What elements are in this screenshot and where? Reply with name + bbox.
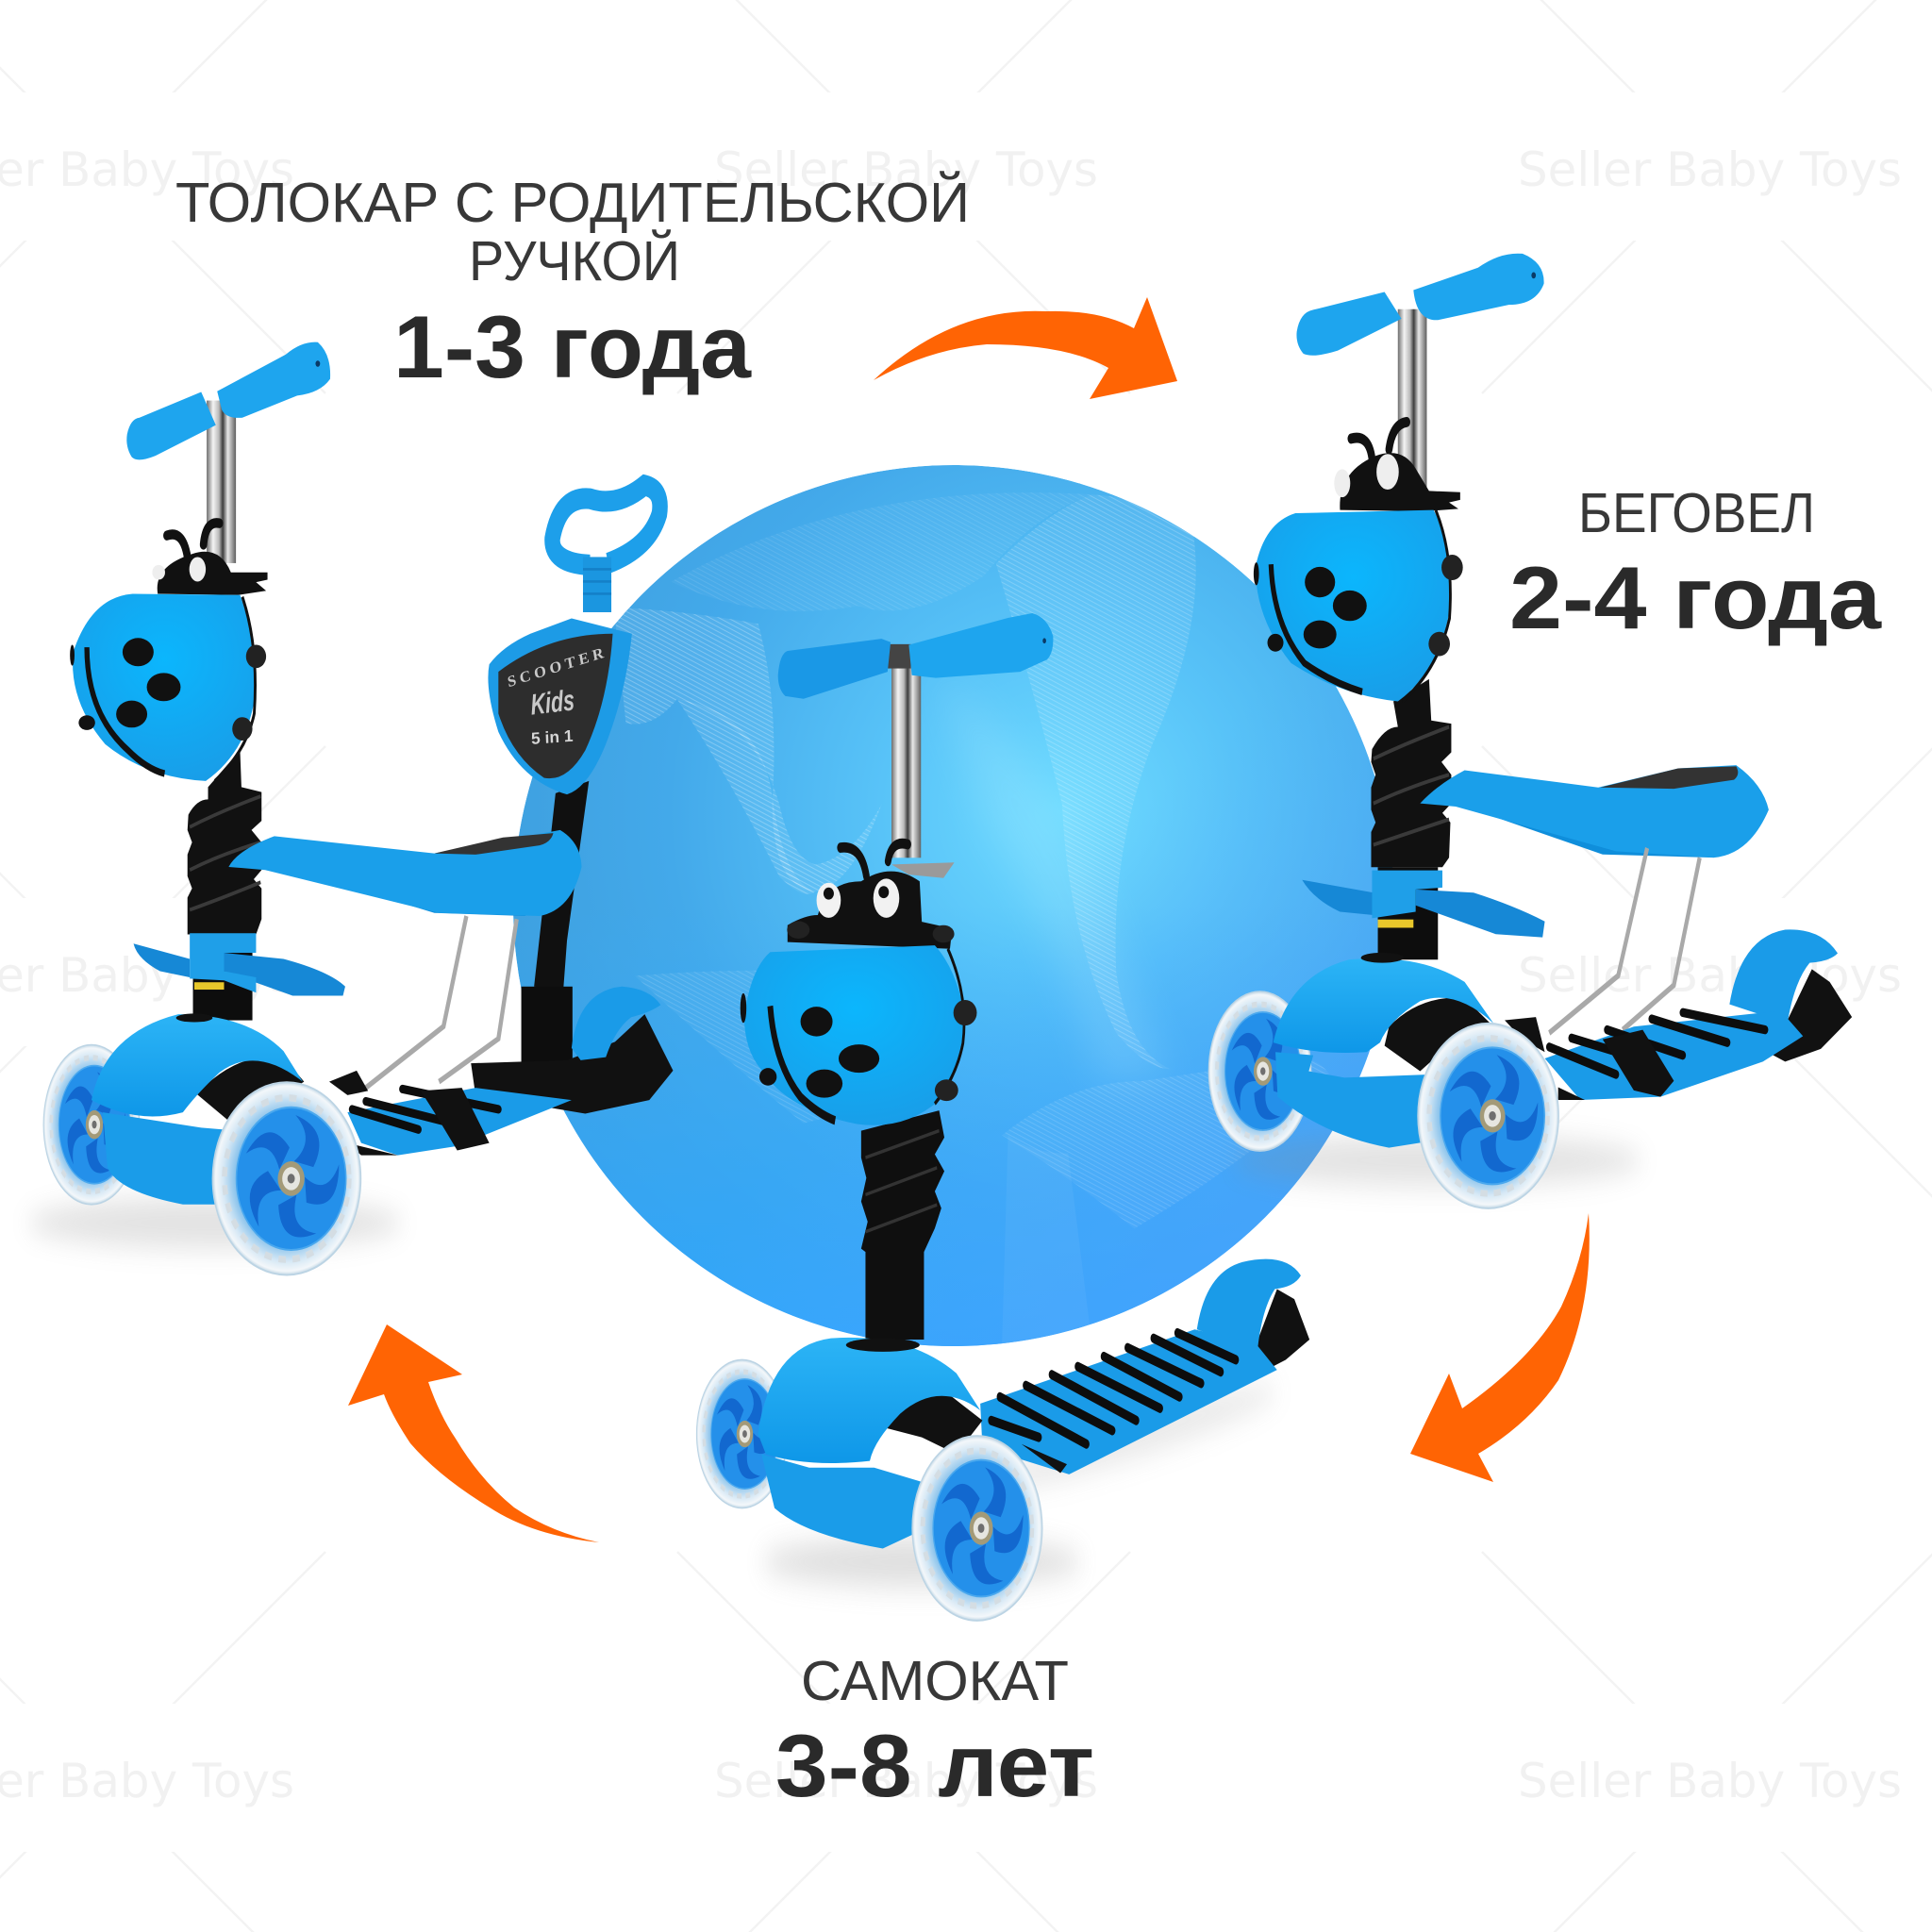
heading: balance bike: БЕГОВЕЛ	[1578, 482, 1815, 544]
spring column	[188, 750, 261, 1021]
heading: kick scooter: САМОКАТ	[801, 1650, 1069, 1712]
sign plate: 5 in 1	[531, 726, 574, 748]
ladybug basket	[1254, 422, 1463, 701]
front body and fender	[1274, 953, 1493, 1148]
right front wheel	[1418, 1024, 1558, 1208]
heading: push car: ТОЛОКАР С РОДИТЕЛЬСКОЙ	[175, 171, 970, 234]
handlebar stem	[891, 662, 921, 858]
floor shadow	[761, 1538, 1082, 1586]
front body and fender	[92, 1013, 304, 1205]
heading: push car: РУЧКОЙ	[469, 229, 680, 292]
rear bracket and fender	[1729, 929, 1852, 1061]
rear bracket and fender	[471, 987, 673, 1113]
sign plate: Kids	[529, 683, 575, 722]
age: 3-8 years: 3-8 лет	[775, 1716, 1094, 1815]
age: 2-4 years: 2-4 года	[1509, 548, 1882, 647]
left front wheel	[1208, 991, 1311, 1151]
scooter: right, balance bike	[1208, 254, 1852, 1208]
arrow: to push car	[348, 1324, 599, 1542]
scooter: centre, kick scooter	[696, 613, 1309, 1621]
watermark pattern: Seller Baby Toys	[1518, 948, 1902, 1003]
handlebar grips	[778, 613, 1053, 699]
arrow: to kick scooter	[1410, 1213, 1590, 1482]
right front wheel	[212, 1082, 360, 1275]
left front wheel	[696, 1359, 788, 1508]
seat rods	[366, 916, 517, 1088]
foot pegs	[1302, 871, 1545, 938]
handlebar grips	[1296, 254, 1544, 356]
left front wheel	[43, 1045, 140, 1205]
deck with ribs	[1505, 1010, 1803, 1100]
scooter: left, with parent handle	[27, 342, 673, 1275]
age: 1-3 years: 1-3 года	[393, 297, 752, 396]
seat rods	[1549, 848, 1700, 1033]
spring column	[1371, 679, 1451, 959]
deck with ribs	[329, 1071, 572, 1156]
arrow: to balance bike	[874, 297, 1177, 399]
sign plate: SCOOTER	[506, 643, 606, 691]
front body and fender	[758, 1338, 982, 1548]
handlebar stem	[1398, 309, 1426, 488]
watermark pattern: Seller Baby Toys	[714, 142, 1098, 197]
watermark pattern: Seller Baby Toys	[1518, 1754, 1902, 1808]
deck with ribs	[980, 1329, 1277, 1474]
heading: push car	[175, 171, 970, 292]
watermark pattern: Seller Baby Toys	[1518, 142, 1902, 197]
spring column	[861, 1110, 944, 1340]
floor shadow	[27, 1197, 403, 1249]
seat	[1420, 765, 1769, 858]
seat	[228, 830, 582, 916]
ladybug basket	[741, 843, 976, 1125]
rear pillar	[534, 781, 589, 990]
handlebar grips	[126, 342, 330, 459]
foot pegs	[134, 933, 345, 996]
watermark pattern: Seller Baby Toys	[714, 1754, 1098, 1808]
sign plate	[488, 618, 632, 794]
ladybug basket	[70, 523, 268, 781]
handlebar stem	[207, 401, 236, 563]
parent handle loop	[552, 485, 660, 612]
rear bracket and fender	[1197, 1259, 1309, 1374]
blue wave disc	[513, 465, 1394, 1346]
right front wheel	[912, 1436, 1042, 1621]
floor shadow	[1233, 1135, 1642, 1186]
